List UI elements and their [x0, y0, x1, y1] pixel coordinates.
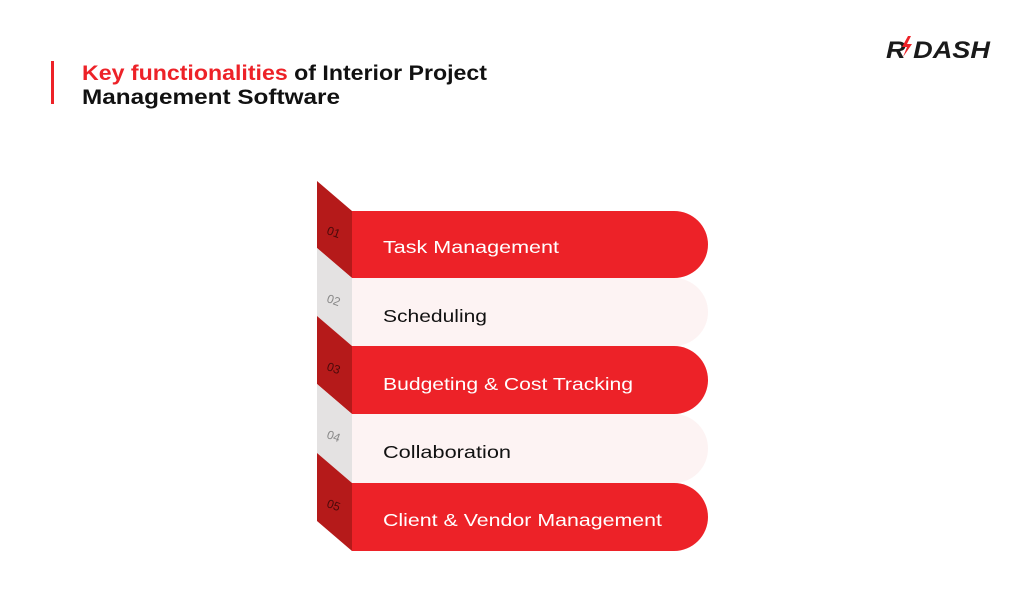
title: Key functionalities of Interior Project: [82, 62, 487, 85]
item 04: Collaboration: [383, 442, 511, 462]
item 02: 02: [325, 291, 343, 309]
item 02: Scheduling: [383, 306, 487, 326]
item 01: 01: [325, 223, 343, 241]
item 02: [317, 248, 708, 346]
title: Management Software: [82, 86, 340, 109]
item 05: [317, 453, 708, 551]
item 05: Client & Vendor Management: [383, 510, 662, 530]
title: [82, 62, 487, 109]
item 01: Task Management: [383, 237, 559, 257]
item 04: 04: [325, 427, 343, 445]
item 03: Budgeting & Cost Tracking: [383, 374, 633, 394]
title accent bar: [51, 61, 54, 104]
item 03: 03: [325, 359, 343, 377]
item 04: [317, 384, 708, 483]
list: functionalities: [317, 181, 708, 551]
item 05: 05: [325, 496, 343, 514]
logo: R DASH: [886, 37, 991, 64]
item 03: [317, 316, 708, 414]
item 01: [317, 181, 708, 278]
